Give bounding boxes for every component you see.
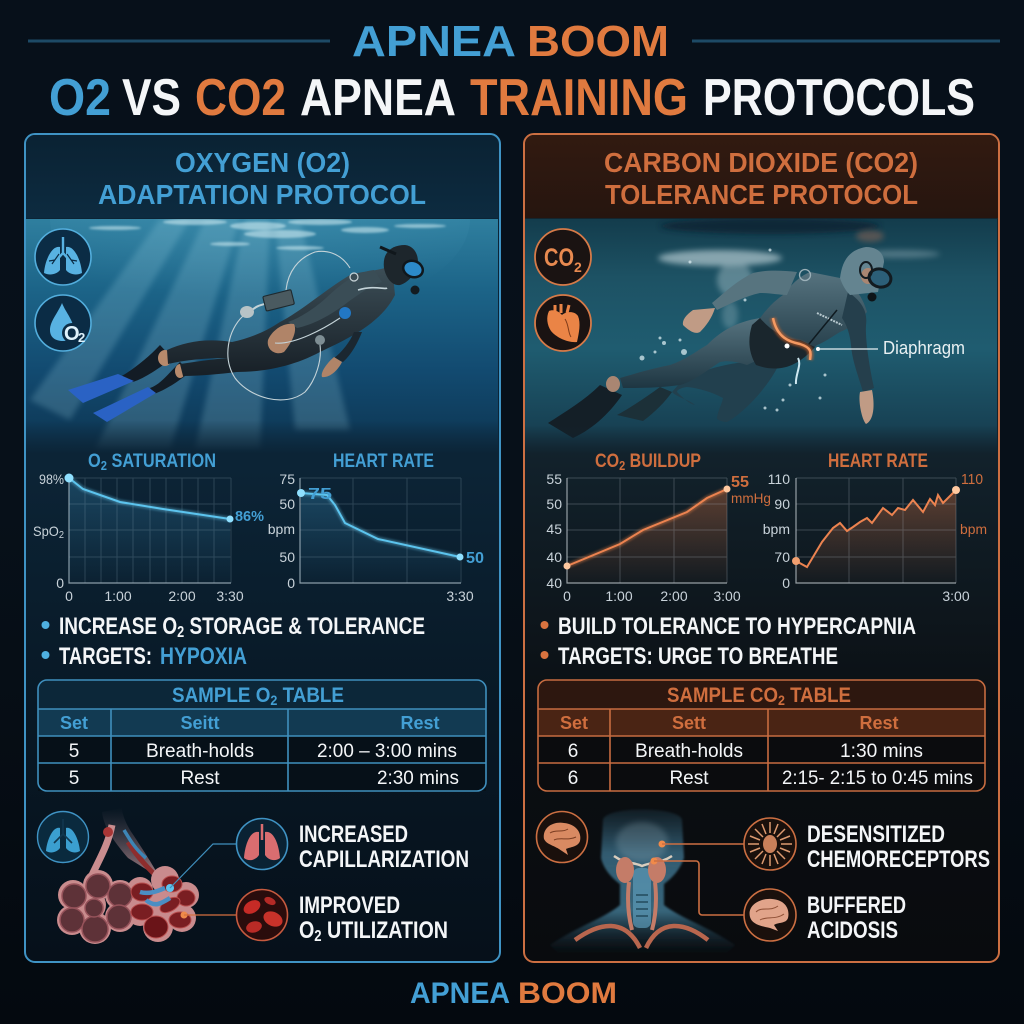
chart: CO2 buildup: 0 — [563, 588, 571, 604]
table: sample O2 table: Rest — [400, 713, 440, 733]
table: sample CO2 table: 2 — [778, 692, 785, 708]
table: sample CO2 table: 2:15- 2:15 to 0:45 mins — [782, 768, 973, 789]
bullet list: CO2 goals — [540, 613, 916, 670]
chart: CO2 buildup: 1:00 — [605, 588, 633, 604]
icon: brain small — [536, 812, 588, 862]
table: sample CO2 table: 6 — [568, 741, 578, 762]
icon: oxygen drop: O — [64, 323, 80, 345]
main title: O2 — [49, 69, 111, 127]
chart: CO2 buildup: 2:00 — [660, 588, 688, 604]
chart: heart rate (CO2 protocol): bpm — [960, 521, 987, 537]
label: diaphragm: Diaphragm — [883, 338, 965, 358]
callout: chemoreceptors: DESENSITIZED — [807, 821, 945, 848]
icon: CO2 badge — [535, 229, 591, 285]
diver: fins, wetsuit, mask and monitor — [68, 245, 425, 422]
chart: O2 saturation: 2:00 — [168, 588, 196, 604]
table: sample CO2 table: Set — [560, 713, 588, 733]
callout: O2 utilization: 2 — [314, 928, 322, 945]
panel heading: carbon dioxide: TOLERANCE PROTOCOL — [605, 179, 918, 210]
chart: CO2 buildup — [546, 451, 771, 604]
bullet list: O2 goals: 2 — [177, 624, 184, 641]
chart: heart rate (CO2 protocol): 90 — [774, 496, 790, 512]
chart: heart rate (CO2 protocol): 110 — [961, 471, 983, 488]
callout: O2 utilization: IMPROVED — [299, 892, 400, 919]
callout: O2 utilization — [184, 890, 448, 945]
chart: heart rate (CO2 protocol): 0 — [782, 575, 790, 591]
bullet list: CO2 goals: BUILD TOLERANCE TO HYPERCAPNIA — [558, 613, 916, 640]
chart: heart rate (O2 protocol) — [268, 451, 484, 604]
bullet list: O2 goals — [42, 613, 425, 670]
icon: oxygen drop — [35, 295, 91, 351]
chart: CO2 buildup: CO — [595, 451, 624, 472]
icon: heart — [535, 295, 591, 351]
chart: CO2 buildup: 45 — [546, 521, 562, 537]
callout: capillarization — [170, 818, 469, 888]
scene: freediver with pulse oximeter underwater — [26, 219, 498, 448]
chart: O2 saturation: 2 — [59, 530, 64, 541]
footer brand: APNEA — [410, 977, 510, 1010]
diver monitor and cable — [228, 251, 387, 400]
main title: TRAINING — [470, 69, 688, 127]
chart: O2 saturation: 86% — [235, 508, 264, 525]
footer brand — [410, 977, 617, 1010]
table: sample CO2 table — [538, 680, 985, 791]
illustration: head and neck anatomy — [550, 810, 735, 955]
panel heading: oxygen — [26, 135, 498, 218]
bullet list: O2 goals: HYPOXIA — [160, 643, 247, 670]
table: sample O2 table: Set — [60, 713, 88, 733]
callout: buffered acidosis — [650, 858, 906, 944]
callout: chemoreceptors — [658, 818, 990, 873]
table: sample O2 table: 5 — [69, 768, 79, 789]
callout: buffered acidosis: BUFFERED — [807, 892, 906, 919]
panel heading: carbon dioxide: CARBON DIOXIDE (CO2) — [604, 147, 918, 178]
chart: CO2 buildup: mmHg — [731, 490, 771, 506]
chart: CO2 buildup: 40 — [546, 575, 562, 591]
panel heading: carbon dioxide — [525, 135, 998, 218]
diver: wetsuit, mask and fins — [548, 247, 893, 438]
chart: heart rate (O2 protocol): HEART RATE — [333, 451, 434, 472]
panel heading: oxygen: ADAPTATION PROTOCOL — [98, 179, 426, 210]
footer brand: BOOM — [518, 977, 617, 1010]
chart: heart rate (O2 protocol): 50 — [466, 550, 484, 567]
chart: CO2 buildup: 40 — [546, 549, 562, 565]
chart: O2 saturation: SpO — [33, 523, 61, 539]
bullet list: O2 goals: INCREASE O — [59, 613, 208, 640]
scene: freediver with diaphragm highlight — [525, 218, 997, 454]
chart: heart rate (CO2 protocol): HEART RATE — [828, 451, 928, 472]
chart: CO2 buildup: 50 — [546, 496, 562, 512]
table: sample O2 table: 2:00 – 3:00 mins — [317, 741, 457, 762]
label: diaphragm — [816, 340, 964, 358]
chart: O2 saturation: 3:30 — [216, 588, 244, 604]
main title: PROTOCOLS — [703, 69, 975, 127]
chart: CO2 buildup: 55 — [731, 474, 749, 491]
main title: APNEA — [352, 17, 516, 66]
table: sample CO2 table: Rest — [859, 713, 899, 733]
table: sample CO2 table: Breath-holds — [635, 741, 743, 762]
icon: lungs small — [38, 812, 88, 862]
table: sample CO2 table: Rest — [669, 768, 709, 789]
table: sample CO2 table: SAMPLE CO — [667, 684, 792, 707]
chart: CO2 buildup: 2 — [619, 458, 625, 473]
table: sample O2 table: 5 — [69, 741, 79, 762]
chart: O2 saturation: SATURATION — [107, 451, 216, 472]
chart: O2 saturation: 0 — [56, 575, 64, 591]
chart: O2 saturation: 0 — [65, 588, 73, 604]
chart: heart rate (CO2 protocol): 110 — [768, 471, 790, 487]
table: sample CO2 table: 6 — [568, 768, 578, 789]
chart: heart rate (O2 protocol): 0 — [287, 575, 295, 591]
chart: O2 saturation: 2 — [101, 458, 107, 473]
icon: CO2 badge: CO — [544, 244, 574, 272]
callout: O2 utilization: UTILIZATION — [322, 917, 448, 944]
chart: heart rate (CO2 protocol): bpm — [763, 521, 790, 537]
icon: CO2 badge: 2 — [574, 259, 582, 275]
table: sample O2 table: 2:30 mins — [377, 768, 459, 789]
table: sample O2 table: SAMPLE O — [172, 684, 282, 707]
chart: O2 saturation — [33, 451, 264, 604]
callout: capillarization: INCREASED — [299, 821, 408, 848]
main title — [28, 17, 1000, 127]
callout: capillarization: CAPILLARIZATION — [299, 846, 469, 873]
table: sample O2 table: TABLE — [277, 684, 344, 707]
chart: heart rate (O2 protocol): 50 — [279, 549, 295, 565]
chart: heart rate (O2 protocol): bpm — [268, 521, 295, 537]
panel: oxygen adaptation protocol — [25, 119, 500, 962]
main title: CO2 — [195, 69, 286, 127]
main title: BOOM — [527, 17, 669, 66]
callout: buffered acidosis: ACIDOSIS — [807, 917, 898, 944]
table: sample O2 table: 2 — [270, 692, 278, 708]
callout: O2 utilization: O — [299, 917, 318, 944]
table: sample CO2 table: Sett — [672, 713, 706, 733]
main title: APNEA — [300, 69, 456, 127]
bullet list: O2 goals: TARGETS: — [59, 643, 152, 670]
chart: heart rate (O2 protocol): 75 — [279, 471, 295, 487]
chart: heart rate (O2 protocol): 3:30 — [446, 588, 474, 604]
chart: O2 saturation: O — [88, 451, 103, 472]
chart: CO2 buildup: 3:00 — [713, 588, 741, 604]
icon: oxygen drop: 2 — [78, 330, 85, 345]
table: sample O2 table — [38, 680, 486, 791]
chart: CO2 buildup: 55 — [546, 471, 562, 487]
table: sample O2 table: Rest — [180, 768, 220, 789]
bullet list: CO2 goals: TARGETS: URGE TO BREATHE — [558, 643, 838, 670]
chart: heart rate (CO2 protocol) — [763, 451, 987, 604]
chart: heart rate (O2 protocol): 75 — [308, 486, 332, 503]
chart: O2 saturation: 1:00 — [104, 588, 132, 604]
table: sample O2 table: Breath-holds — [146, 741, 254, 762]
illustration: alveoli clusters and bronchi — [57, 808, 199, 944]
chart: heart rate (CO2 protocol): 3:00 — [942, 588, 970, 604]
table: sample CO2 table: TABLE — [785, 684, 851, 707]
icon: lungs — [35, 229, 91, 285]
panel heading: oxygen: OXYGEN (O2) — [175, 147, 350, 178]
chart: CO2 buildup: BUILDUP — [625, 451, 701, 472]
chart: heart rate (O2 protocol): 50 — [279, 496, 295, 512]
table: sample CO2 table: 1:30 mins — [840, 741, 923, 762]
table: sample O2 table: Seitt — [180, 713, 220, 733]
main title: VS — [122, 69, 181, 127]
panel: carbon dioxide tolerance protocol — [524, 134, 999, 962]
chart: O2 saturation: 98% — [39, 471, 64, 487]
bullet list: O2 goals: STORAGE & TOLERANCE — [184, 613, 425, 640]
chart: heart rate (CO2 protocol): 70 — [774, 549, 790, 565]
